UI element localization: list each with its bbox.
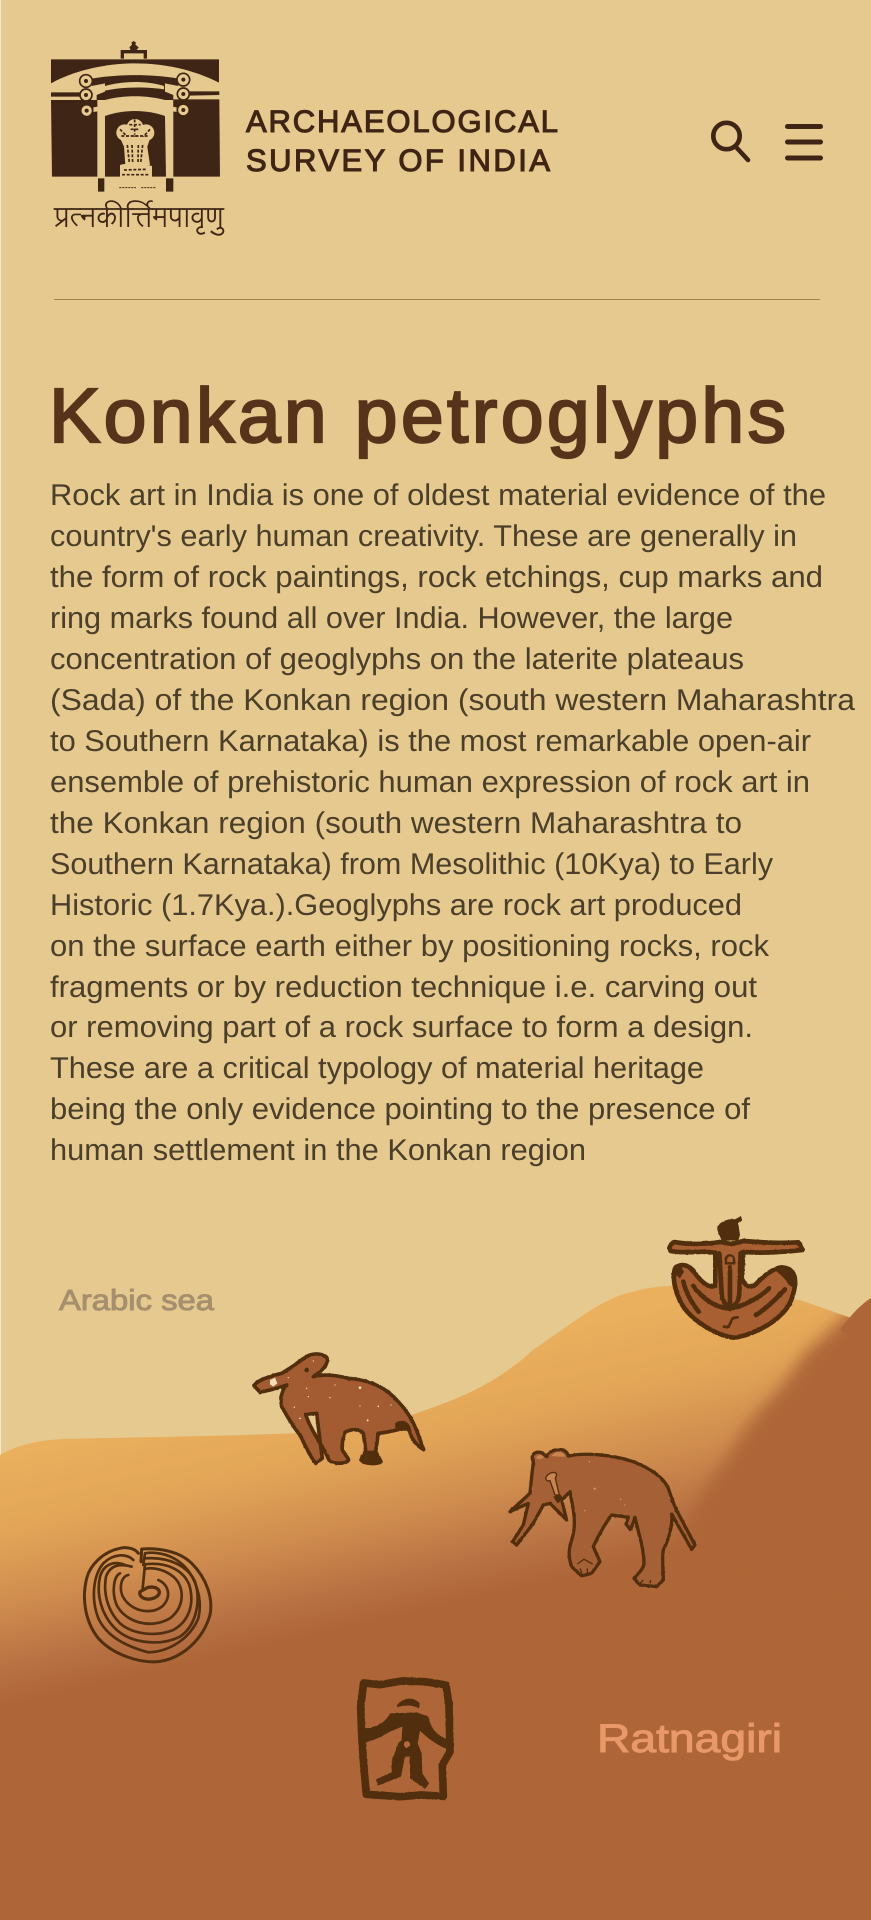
body text: country's early human creativity. These are generally in (50, 520, 797, 553)
body text: (Sada) of the Konkan region (south western Maharashtra (50, 684, 855, 717)
body text (50, 479, 855, 1167)
body text: Rock art in India is one of oldest material evidence of the (50, 479, 826, 512)
national emblem (116, 119, 154, 179)
petroglyph: animal (254, 1354, 424, 1464)
icon: search (713, 123, 748, 160)
body text: on the surface earth either by positioning rocks, rock (50, 930, 770, 963)
body text: or removing part of a rock surface to form a design. (50, 1011, 753, 1044)
petroglyph: concentric labyrinth (84, 1548, 211, 1662)
body text: ensemble of prehistoric human expression of rock art in (50, 766, 810, 799)
body text: the Konkan region (south western Maharashtra to (50, 807, 742, 840)
header (51, 41, 823, 242)
body text: fragments or by reduction technique i.e. carving out (50, 971, 758, 1004)
body text: Southern Karnataka) from Mesolithic (10Kya) to Early (50, 848, 773, 881)
organisation name (246, 104, 558, 178)
title: Konkan petroglyphs (49, 373, 786, 459)
label: Ratnagiri: Ratnagiri (597, 1717, 782, 1761)
body text: human settlement in the Konkan region (50, 1134, 586, 1167)
organisation name: SURVEY OF INDIA (246, 143, 550, 178)
body text: ring marks found all over India. However, the large (50, 602, 733, 635)
body text: the form of rock paintings, rock etchings, cup marks and (50, 561, 823, 594)
organisation name: ARCHAEOLOGICAL (246, 104, 558, 139)
body text: being the only evidence pointing to the presence of (50, 1093, 751, 1126)
body text: to Southern Karnataka) is the most remarkable open-air (50, 725, 811, 758)
body text: concentration of geoglyphs on the laterite plateaus (50, 643, 744, 676)
petroglyph: human figure with anchor-shaped body (669, 1216, 803, 1338)
petroglyph: elephant (510, 1450, 695, 1587)
body text: Historic (1.7Kya.).Geoglyphs are rock art produced (50, 889, 742, 922)
icon: menu (785, 124, 823, 160)
hills (0, 1286, 871, 1920)
label: Arabic sea: Arabic sea (59, 1285, 215, 1317)
petroglyph: human figure in rectangular frame (361, 1681, 450, 1797)
logo motto in Devanagari: प्रत्नकीर्त्तिमपावृणु (53, 195, 225, 242)
landscape map (0, 1216, 871, 1920)
body text: These are a critical typology of material heritage (50, 1052, 704, 1085)
logo: Archaeological Survey of India emblem (51, 41, 220, 192)
